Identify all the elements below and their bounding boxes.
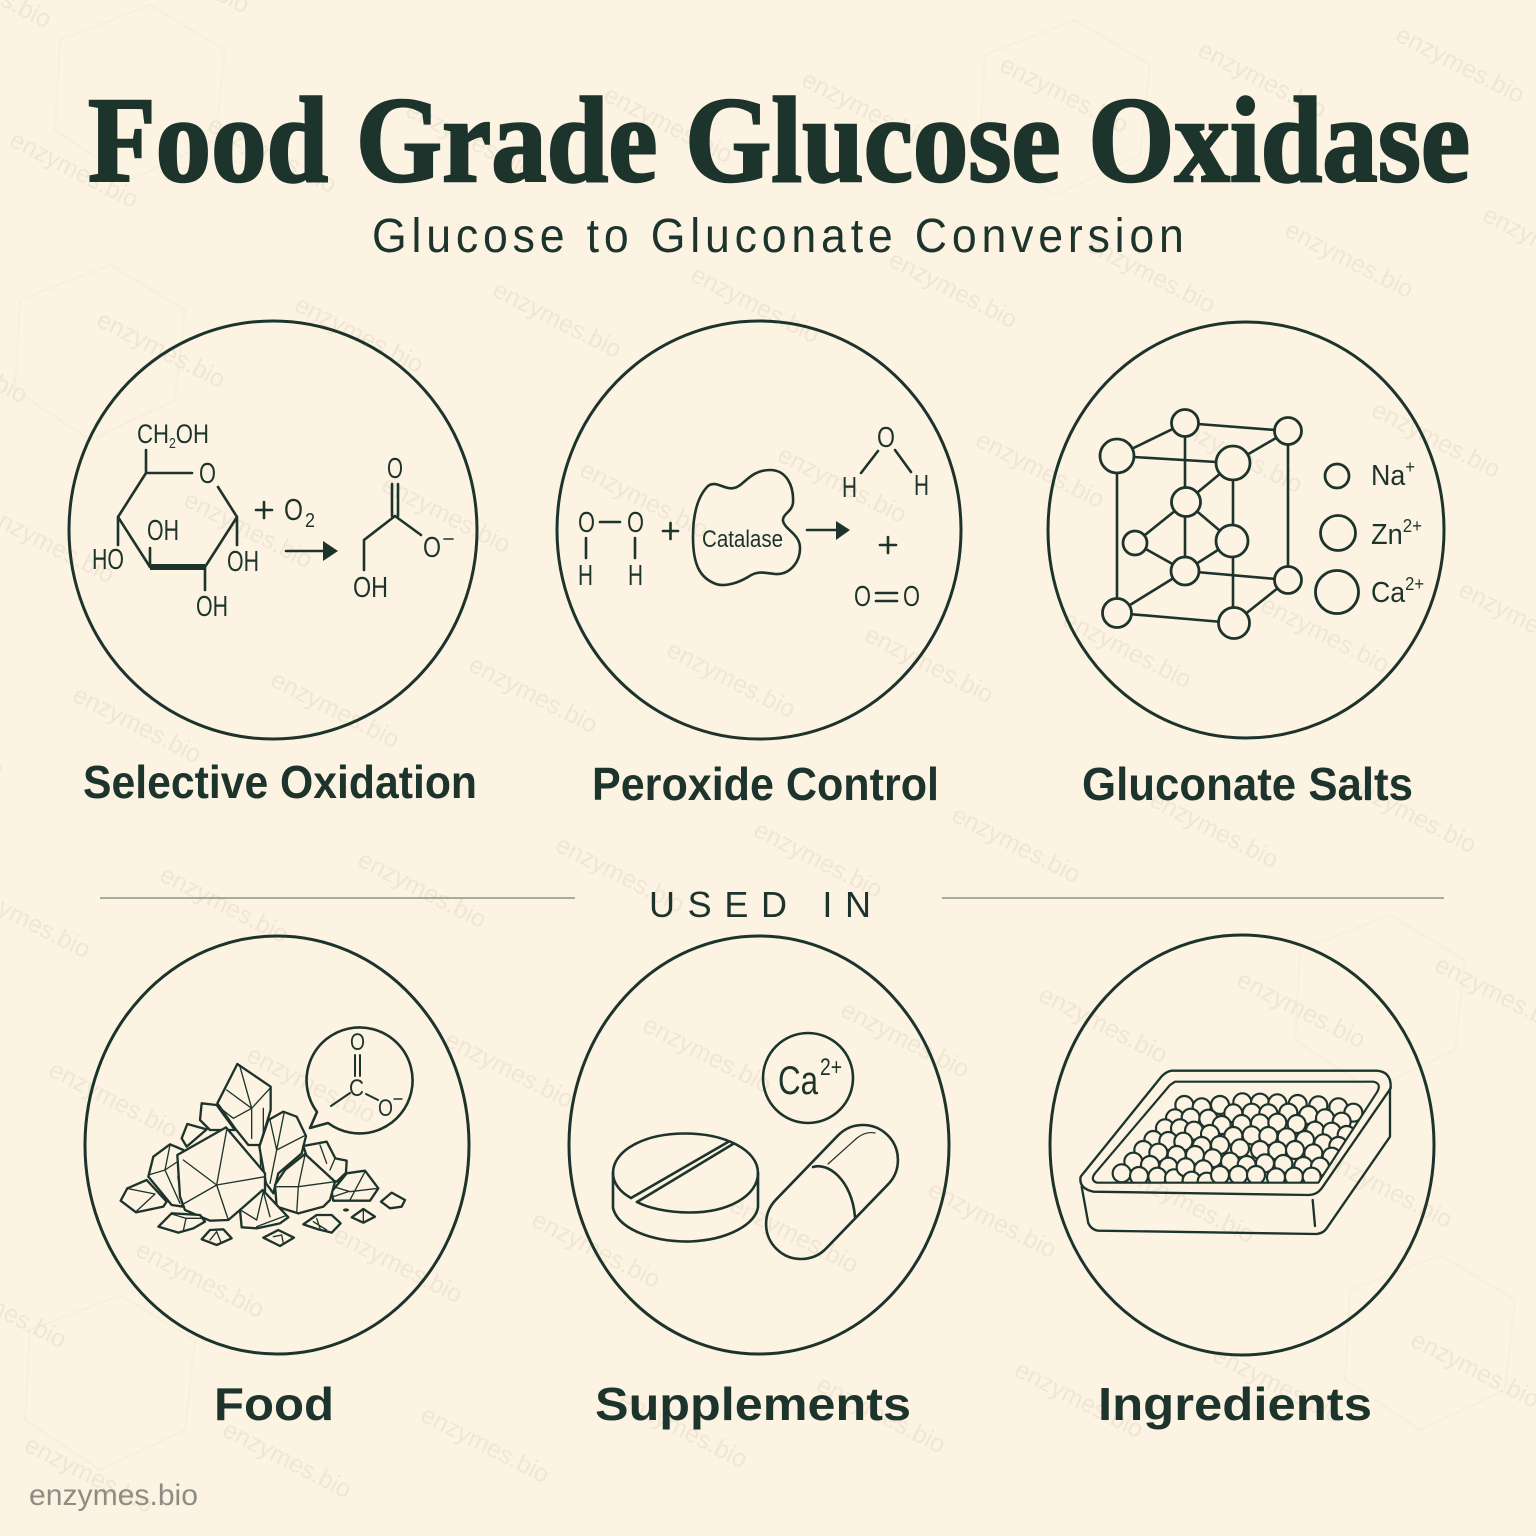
text: enzymes.bio [971,425,1109,514]
text: enzymes.bio [155,860,293,949]
text: enzymes.bio [1010,1355,1148,1444]
text: enzymes.bio [797,65,935,154]
text: enzymes.bio [1280,215,1418,304]
glucose ring structure: O [199,458,216,490]
text: enzymes.bio [749,815,887,904]
reagent: plus oxygen: 2 [305,510,315,532]
footer brand: enzymes.bio [29,1479,198,1512]
ion legend [1316,457,1424,614]
label: selective oxidation: Selective Oxidation [83,756,477,808]
panel: selective oxidation [69,321,477,739]
text: enzymes.bio [290,290,428,379]
glucose ring structure: 2 [169,435,176,452]
text: enzymes.bio [1058,605,1196,694]
calcium ion badge [763,1033,853,1123]
text: enzymes.bio [773,440,911,529]
divider heading: used in: USED IN [649,884,871,925]
water and oxygen products: O [903,581,920,613]
glucose ring structure: OH [176,419,209,449]
glucose ring structure: HO [92,544,124,576]
ion legend: 2+ [1405,574,1424,594]
text: enzymes.bio [353,845,491,934]
hydrogen peroxide: O [578,507,595,539]
text: enzymes.bio [947,800,1085,889]
callout: carboxylate bubble [307,1027,413,1133]
gluconate structure [353,453,453,604]
text: enzymes.bio [638,1010,776,1099]
circle outline [1048,322,1444,738]
text: enzymes.bio [923,1175,1061,1264]
text: enzymes.bio [1208,1340,1346,1429]
crystal lattice [1100,410,1302,638]
text: enzymes.bio [662,635,800,724]
text: enzymes.bio [179,485,317,574]
text: enzymes.bio [725,1190,863,1279]
circle outline [85,936,469,1354]
catalase blob: Catalase [702,526,783,553]
text: enzymes.bio [812,1370,950,1459]
text: enzymes.bio [1169,410,1307,499]
water and oxygen products: H [914,470,929,502]
hydrogen peroxide [578,507,644,592]
label: ingredients: Ingredients [1098,1378,1372,1430]
ion legend: + [1405,457,1415,477]
calcium ion badge: 2+ [820,1054,842,1081]
callout: carboxylate bubble: C [349,1075,364,1102]
ion legend: 2+ [1403,516,1422,536]
text: enzymes.bio [203,110,341,199]
callout: carboxylate bubble: O [350,1029,365,1056]
text: enzymes.bio [464,650,602,739]
text: enzymes.bio [329,1220,467,1309]
text: enzymes.bio [218,1415,356,1504]
gluconate structure: OH [353,572,388,604]
hydrogen peroxide: O [627,507,644,539]
text: enzymes.bio [488,275,626,364]
glucose ring structure [92,419,259,623]
text: enzymes.bio [1034,980,1172,1069]
text: enzymes.bio [575,455,713,544]
text: enzymes.bio [1256,590,1394,679]
text: enzymes.bio [266,665,404,754]
circle outline [1050,935,1434,1355]
water and oxygen products: O [877,422,895,454]
arrow [286,541,338,561]
reagent: plus oxygen: O [284,492,303,527]
text: enzymes.bio [1232,965,1370,1054]
calcium ion badge: Ca [778,1059,819,1103]
panel: ingredients [1050,935,1434,1355]
text: enzymes.bio [44,1055,182,1144]
plus [663,523,678,539]
label: peroxide control: Peroxide Control [592,758,939,810]
catalase blob [693,470,800,585]
glucose ring structure: CH [137,419,176,449]
water and oxygen products: H [842,472,857,504]
label: supplements: Supplements [595,1378,911,1430]
text: enzymes.bio [884,245,1022,334]
text: enzymes.bio [92,305,230,394]
text: enzymes.bio [836,995,974,1084]
panel: peroxide control [557,321,961,739]
text: enzymes.bio [1121,1160,1259,1249]
reagent: plus oxygen [256,492,315,532]
circle outline [569,936,949,1354]
text: enzymes.bio [1391,20,1529,109]
text: enzymes.bio [377,470,515,559]
text: enzymes.bio [68,680,206,769]
callout: carboxylate bubble: O [378,1095,393,1122]
text: enzymes.bio [1193,35,1331,124]
water and oxygen products [842,422,929,613]
glucose ring structure: OH [196,591,228,623]
text: enzymes.bio [416,1400,554,1489]
text: enzymes.bio [401,95,539,184]
ion legend: Na [1371,460,1408,492]
text: enzymes.bio [1343,770,1481,859]
icon: tray of beads [1080,1071,1391,1234]
ion legend: Zn [1371,519,1405,551]
ion legend: Ca [1371,577,1408,609]
text: enzymes.bio [614,1385,752,1474]
circle outline [69,321,477,739]
gluconate structure: O [387,453,403,485]
text: enzymes.bio [20,1430,158,1519]
panel: supplements [569,936,949,1354]
panel: gluconate salts [1048,322,1444,738]
glucose ring structure: OH [147,515,179,547]
text: enzymes.bio [599,80,737,169]
hydrogen peroxide: H [628,560,643,592]
icon: tablet [613,1134,758,1242]
text: enzymes.bio [131,1235,269,1324]
text: enzymes.bio [860,620,998,709]
panel: food [85,936,469,1354]
text: enzymes.bio [527,1205,665,1294]
text: enzymes.bio [1319,1145,1457,1234]
hydrogen peroxide: H [578,560,593,592]
gluconate structure: O [423,532,441,564]
text: enzymes.bio [1145,785,1283,874]
circle outline [557,321,961,739]
water and oxygen products: O [854,581,871,613]
label: food: Food [214,1378,334,1430]
text: enzymes.bio [5,125,143,214]
icon: capsule [752,1110,912,1274]
text: enzymes.bio [551,830,689,919]
text: enzymes.bio [1367,395,1505,484]
text: enzymes.bio [1082,230,1220,319]
subtitle: Glucose to Gluconate Conversion [372,209,1184,262]
label: gluconate salts: Gluconate Salts [1082,758,1413,810]
icon: crystal pile [121,1064,405,1246]
text: enzymes.bio [440,1025,578,1114]
arrow [807,521,850,540]
glucose ring structure: OH [227,546,259,578]
text: enzymes.bio [242,1040,380,1129]
text: enzymes.bio [686,260,824,349]
text: enzymes.bio [995,50,1133,139]
